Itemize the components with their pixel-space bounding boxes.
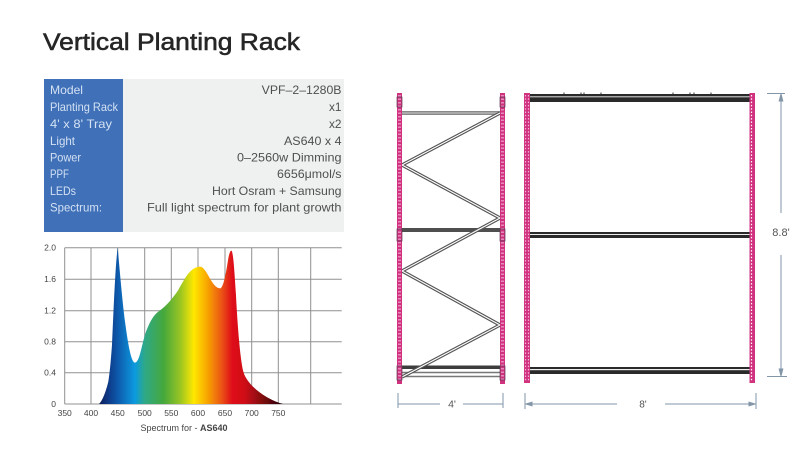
dimension: 8 ft width <box>525 393 756 410</box>
x axis labels: 450 <box>111 408 125 418</box>
diagram: front view rack, 8 ft <box>524 92 755 383</box>
table labels: PPF <box>50 167 69 181</box>
y axis labels: 0.8 <box>44 336 56 346</box>
dimension: 4 ft width: 4' <box>448 398 456 410</box>
table labels: Spectrum: <box>50 200 102 214</box>
table labels: Light <box>50 134 76 148</box>
dimension: 8 ft width: 8' <box>639 400 647 410</box>
y axis labels: 1.6 <box>44 274 56 284</box>
y axis labels: 2.0 <box>44 242 56 252</box>
title: Vertical Planting Rack <box>43 29 301 56</box>
table values: Hort Osram + Samsung <box>212 184 342 198</box>
x axis labels <box>58 408 286 418</box>
x axis labels: 650 <box>218 408 232 418</box>
dimension: 4 ft width <box>398 393 503 410</box>
y axis labels: 1.2 <box>44 306 56 316</box>
table values: VPF–2–1280B <box>262 83 342 97</box>
x axis labels: 700 <box>245 408 259 418</box>
dimension: 8.8 ft height <box>767 94 790 376</box>
table labels: LEDs <box>50 184 76 198</box>
x axis labels: 550 <box>164 408 179 418</box>
panel: specification table <box>44 79 344 232</box>
x axis labels: 350 <box>58 408 72 418</box>
table values: 6656μmol/s <box>277 167 342 181</box>
table labels: Model <box>50 83 83 97</box>
table values: x2 <box>329 117 342 131</box>
table labels <box>50 83 119 214</box>
side view beams <box>401 112 500 376</box>
chart: light spectrum <box>44 242 342 433</box>
side view diagonal braces <box>402 113 500 377</box>
table values: 0–2560w Dimming <box>237 150 342 164</box>
side view posts <box>397 93 505 384</box>
x axis labels: 750 <box>271 408 286 418</box>
diagram: side view rack, 4 ft <box>397 93 505 384</box>
dimension: 8.8 ft height: 8.8' <box>772 227 790 239</box>
front view posts <box>524 93 755 383</box>
y axis labels: 0.4 <box>44 368 56 378</box>
table labels: Power <box>50 150 81 164</box>
y axis labels: 0 <box>51 399 56 409</box>
table values <box>147 83 342 214</box>
chart caption: Spectrum for - AS640 <box>140 423 228 433</box>
spectrum curve <box>99 248 283 404</box>
x axis labels: 400 <box>84 408 98 418</box>
x axis labels: 500 <box>138 408 152 418</box>
x axis labels: 600 <box>191 408 205 418</box>
table labels: Planting Rack <box>50 100 119 114</box>
y axis labels <box>44 242 56 409</box>
table values: x1 <box>329 100 342 114</box>
table values: AS640 x 4 <box>284 134 342 148</box>
front view beams <box>529 92 750 374</box>
table labels: 4' x 8' Tray <box>50 117 112 131</box>
table values: Full light spectrum for plant growth <box>147 200 342 214</box>
